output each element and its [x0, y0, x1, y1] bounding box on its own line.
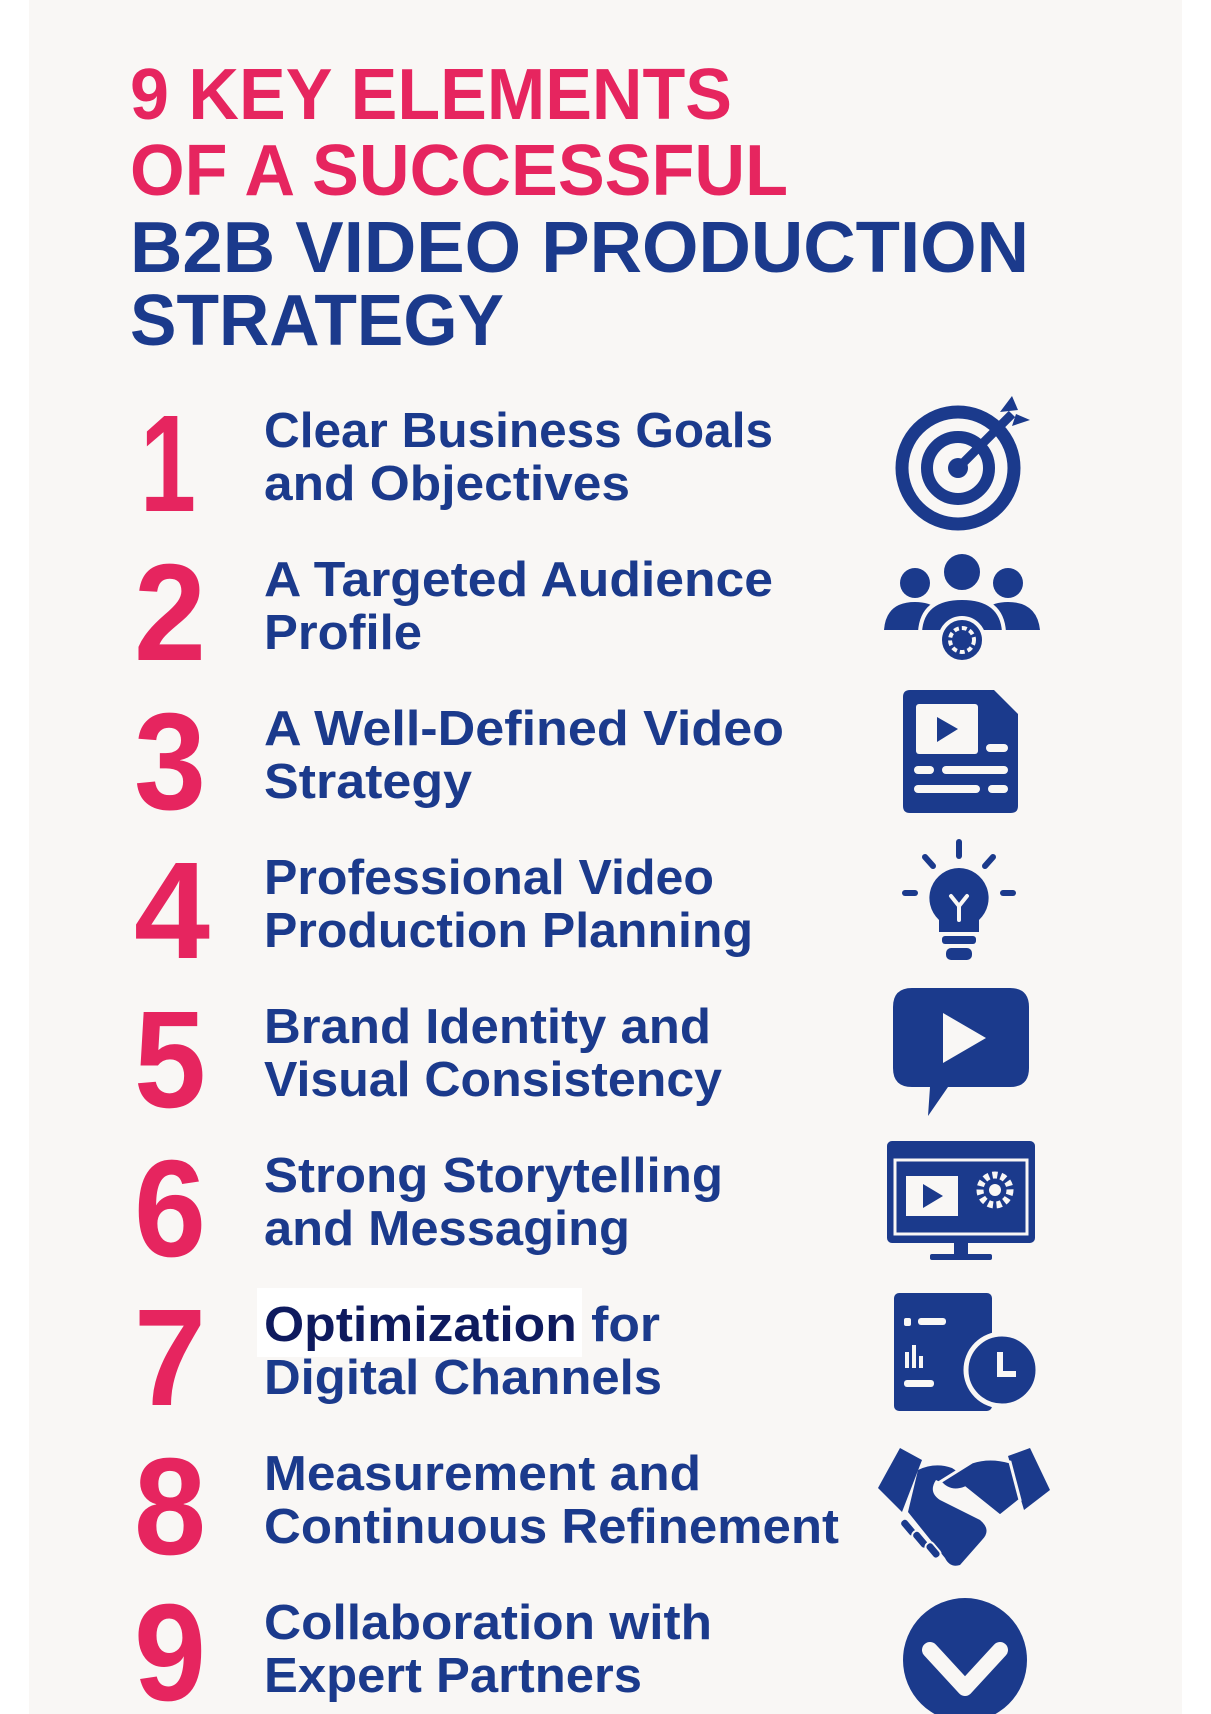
title — [130, 55, 1029, 361]
item 2: 2 — [134, 536, 206, 690]
item 9 — [134, 1576, 712, 1714]
item 6: and Messaging — [264, 1202, 630, 1256]
title: B2B VIDEO PRODUCTION — [130, 208, 1029, 288]
icon: target — [902, 396, 1030, 524]
icon: handshake — [878, 1448, 1050, 1566]
title: OF A SUCCESSFUL — [130, 131, 788, 211]
item 4: 4 — [134, 834, 210, 988]
item 7: Optimization for — [264, 1298, 660, 1352]
item 7: 7 — [134, 1281, 206, 1435]
item 1: 1 — [140, 387, 196, 541]
title: STRATEGY — [130, 281, 504, 361]
item 2: Profile — [264, 606, 422, 660]
item 1: Clear Business Goals — [264, 404, 773, 458]
item 9: Expert Partners — [264, 1649, 642, 1703]
item 6: 6 — [134, 1132, 206, 1286]
item 3: Strategy — [264, 755, 472, 809]
item 8: Measurement and — [264, 1447, 701, 1501]
item 3 — [134, 685, 784, 839]
item 1: and Objectives — [264, 457, 630, 511]
item 4: Production Planning — [264, 904, 753, 958]
item 1 — [140, 387, 773, 541]
item 8: 8 — [134, 1430, 206, 1584]
item 8 — [134, 1430, 839, 1584]
icon: video speech bubble — [893, 988, 1029, 1116]
item 7 — [134, 1281, 662, 1435]
item 4: Professional Video — [264, 851, 714, 905]
item 8: Continuous Refinement — [264, 1500, 839, 1554]
item 5: Brand Identity and — [264, 1000, 711, 1054]
title: 9 KEY ELEMENTS — [130, 55, 732, 135]
item 6: Strong Storytelling — [264, 1149, 723, 1203]
icon: audience — [884, 552, 1040, 662]
icon: light bulb — [905, 842, 1013, 960]
item 6 — [134, 1132, 723, 1286]
item 4 — [134, 834, 753, 988]
icon: video document — [903, 690, 1018, 813]
item 7: Digital Channels — [264, 1351, 662, 1405]
icon: analytics clock — [894, 1293, 1038, 1411]
item 3: 3 — [134, 685, 206, 839]
item 9: Collaboration with — [264, 1596, 712, 1650]
icon: monitor — [887, 1141, 1035, 1260]
icon: check circle — [903, 1598, 1027, 1714]
item 2: A Targeted Audience — [264, 553, 773, 607]
item 5: 5 — [134, 983, 206, 1137]
item 3: A Well-Defined Video — [264, 702, 784, 756]
item 5: Visual Consistency — [264, 1053, 722, 1107]
item 5 — [134, 983, 722, 1137]
item 2 — [134, 536, 773, 690]
